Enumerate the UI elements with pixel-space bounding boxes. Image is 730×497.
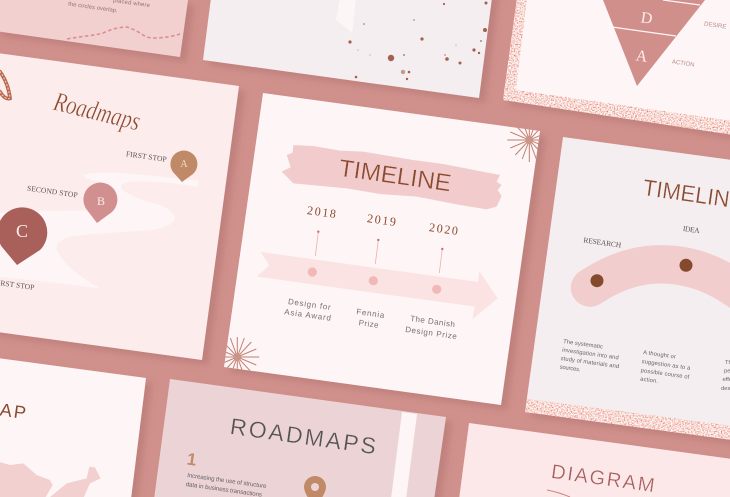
numeral 1: 1	[186, 449, 198, 470]
glitter squiggle top left	[0, 72, 10, 99]
map shape	[0, 462, 101, 497]
arrow	[257, 252, 498, 319]
paragraph: idea: A thought or	[643, 350, 676, 361]
paragraph: idea	[640, 350, 691, 385]
panel: bottom-middle roadmaps slide	[153, 379, 446, 497]
brush stroke banner	[282, 145, 502, 209]
glitter strip	[525, 399, 730, 441]
pin C	[0, 207, 47, 265]
dashed wave	[67, 27, 180, 39]
gold splatter	[348, 2, 488, 80]
milestone labels	[284, 297, 458, 341]
label: first stop: FIRST STOP	[125, 149, 167, 164]
paragraph: research: investigation into and	[562, 348, 619, 361]
milestone labels: Asia Award	[284, 307, 332, 323]
winding road	[0, 173, 198, 289]
curved band	[590, 264, 730, 297]
glitter border	[503, 0, 730, 136]
letter D: D	[640, 9, 654, 28]
vertical white stripe	[390, 412, 417, 497]
panel: centre timeline slide	[215, 93, 551, 405]
panel: top-middle slide	[203, 0, 493, 98]
milestone labels: Design for	[287, 297, 332, 312]
label: action: ACTION	[671, 59, 695, 69]
year labels	[306, 203, 459, 238]
title: TIMELINE	[337, 155, 453, 197]
panel: bottom-right diagram slide	[458, 423, 730, 497]
year labels: 2019	[366, 211, 397, 229]
description text: Increasing the use of structure	[187, 472, 267, 490]
paragraph: research: The systematic	[563, 339, 603, 351]
letter A: A	[635, 47, 649, 66]
slide interior	[516, 0, 730, 122]
sunburst top right	[507, 128, 540, 162]
arrow dots	[308, 267, 441, 294]
panel: left roadmaps slide	[0, 52, 239, 360]
pin A	[170, 151, 197, 182]
paragraph: research: study of materials and	[560, 356, 619, 370]
panel: top-left slide	[0, 0, 188, 57]
label: idea: IDEA	[682, 224, 701, 235]
milestone labels: Prize	[358, 318, 380, 330]
milestone labels: The Danish	[410, 314, 456, 329]
pin A: A	[180, 159, 188, 170]
paragraph: idea: possible course of	[640, 368, 690, 381]
year pins	[315, 230, 443, 273]
pin B: B	[97, 194, 105, 208]
text: circles overlap: the circles overlap.	[68, 2, 118, 14]
paragraph: research	[559, 339, 619, 373]
sunburst bottom left	[224, 337, 260, 371]
funnel dividers	[612, 0, 700, 36]
curve fragment	[547, 490, 570, 497]
glitter squiggle bottom right	[160, 312, 207, 335]
paragraph: research: sources.	[559, 365, 581, 373]
panel: top-right funnel slide	[503, 0, 730, 136]
label: second stop: SECOND STOP	[26, 184, 78, 200]
location pin	[304, 476, 326, 497]
panel: bottom-left map slide	[0, 357, 146, 497]
band dots	[590, 259, 692, 287]
title: ROADMAPS	[229, 413, 378, 459]
paragraph: idea: action.	[640, 377, 659, 385]
panel: right timeline slide	[525, 137, 730, 441]
title: DIAGRAM	[550, 461, 656, 497]
milestone labels: Design Prize	[405, 325, 458, 341]
pin B	[83, 183, 117, 223]
paragraph: idea: suggestion as to a	[641, 359, 691, 372]
year labels: 2018	[306, 203, 337, 221]
milestone labels: Fennia	[356, 307, 385, 320]
label: desire: DESIRE	[704, 21, 727, 31]
light wedge	[336, 0, 356, 33]
paragraph: third, cropped	[721, 360, 730, 392]
text: circles overlap	[68, 0, 150, 14]
script title: Roadmaps	[50, 86, 143, 136]
pin C: C	[16, 221, 28, 241]
year labels: 2020	[428, 220, 459, 238]
label: research: RESEARCH	[583, 235, 622, 250]
funnel triangle	[603, 0, 705, 86]
